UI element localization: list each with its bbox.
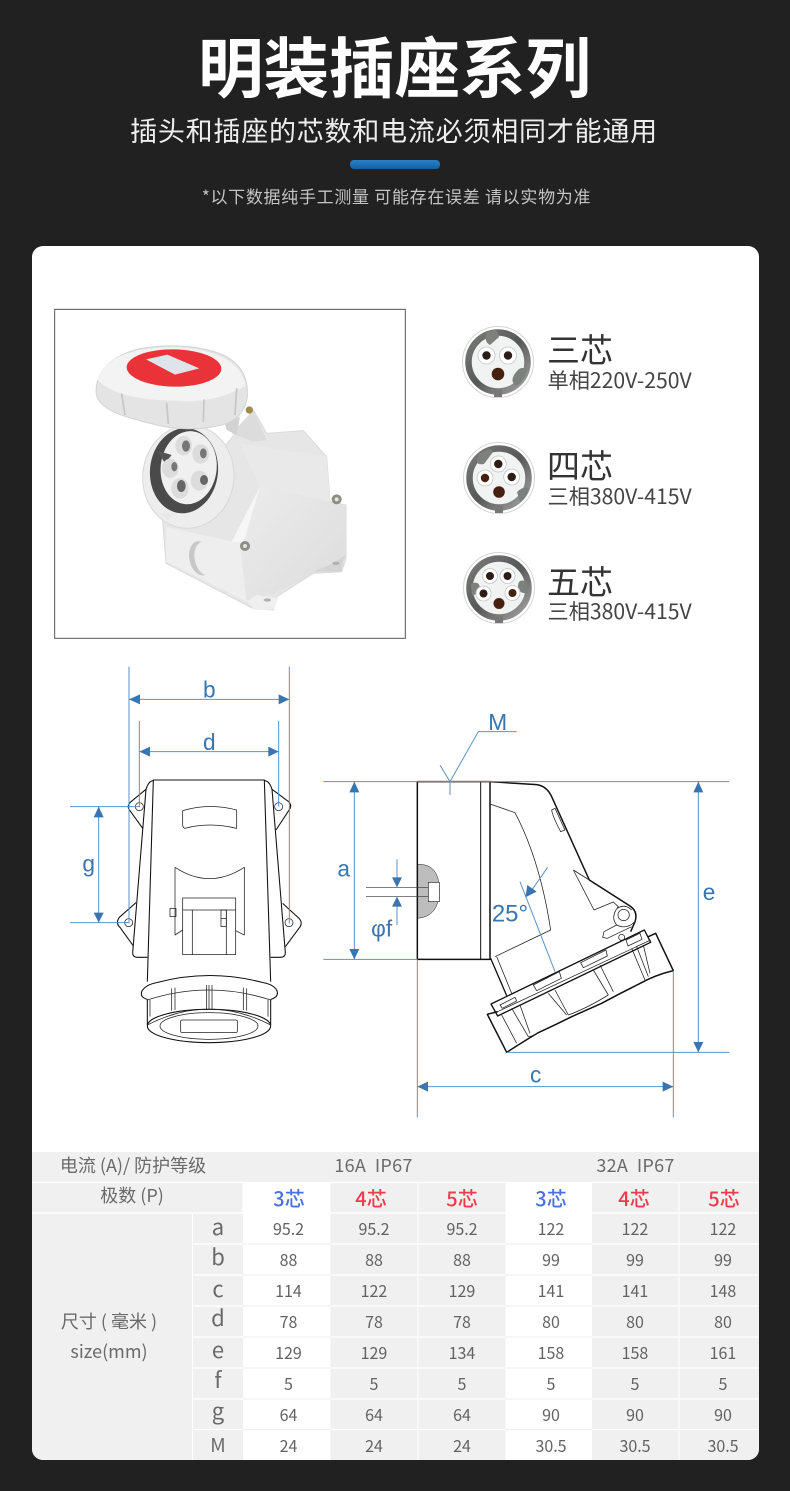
table header: poles: 5芯 bbox=[708, 1183, 740, 1212]
table values: column 16A 5 core: 88 bbox=[453, 1247, 471, 1271]
table values: column 32A 4 core: 99 bbox=[626, 1247, 644, 1271]
table header: poles: 3芯 bbox=[273, 1183, 305, 1212]
dimension e: e bbox=[703, 879, 715, 905]
table header: poles: 3芯 bbox=[535, 1183, 567, 1212]
table header: poles: 4芯 bbox=[355, 1183, 387, 1212]
table values: column 16A 3 core: 114 bbox=[275, 1278, 302, 1302]
table: dimensions bbox=[32, 1152, 759, 1460]
table values: column 32A 3 core: 141 bbox=[538, 1278, 564, 1302]
table header: current and protection bbox=[62, 1156, 674, 1176]
subtitle: 插头和插座的芯数和电流必须相同才能通用 bbox=[130, 110, 658, 149]
table values: column 32A 4 core: 5 bbox=[631, 1371, 640, 1395]
dimension e bbox=[417, 782, 729, 1052]
table side label: size: size(mm) bbox=[70, 1338, 148, 1364]
table values: column 32A 5 core: 90 bbox=[714, 1402, 732, 1426]
table values: column 32A 4 core bbox=[619, 1216, 651, 1457]
table values: column 32A 5 core: 5 bbox=[719, 1371, 728, 1395]
table row labels: e bbox=[212, 1333, 224, 1365]
table values: column 16A 4 core: 122 bbox=[361, 1278, 387, 1302]
table row labels: d bbox=[211, 1301, 225, 1333]
table values: column 32A 4 core: 90 bbox=[626, 1402, 644, 1426]
table values: column 32A 3 core: 80 bbox=[542, 1309, 560, 1333]
table values: column 16A 3 core: 24 bbox=[280, 1433, 297, 1457]
table values: column 16A 5 core bbox=[446, 1216, 478, 1457]
table values: column 32A 4 core: 122 bbox=[622, 1216, 648, 1240]
table values: column 16A 4 core: 78 bbox=[365, 1309, 383, 1333]
text: five-core label bbox=[547, 556, 693, 626]
table row labels: g bbox=[212, 1394, 225, 1426]
icon: socket body bbox=[163, 410, 346, 610]
icon: hinged cover with red cap bbox=[96, 346, 253, 435]
dimension a bbox=[323, 782, 417, 959]
table values: column 16A 4 core: 64 bbox=[365, 1402, 383, 1426]
dimension a: a bbox=[337, 856, 350, 882]
dimension M leader bbox=[440, 709, 517, 795]
table values: column 16A 5 core: 134 bbox=[449, 1340, 475, 1364]
dimension phi f: φf bbox=[371, 916, 393, 942]
table header: current and protection: 16A IP67 bbox=[334, 1152, 413, 1178]
table values: column 32A 4 core: 30.5 bbox=[619, 1433, 651, 1457]
table row labels: f bbox=[214, 1363, 222, 1395]
dimension d bbox=[139, 721, 279, 807]
table row labels: b bbox=[211, 1240, 225, 1272]
table header: poles bbox=[100, 1186, 739, 1208]
dimension c: c bbox=[530, 1061, 541, 1087]
dimension d: d bbox=[203, 729, 216, 755]
panel: product photo bbox=[55, 309, 405, 638]
table values: column 16A 5 core: 64 bbox=[453, 1402, 471, 1426]
table values: column 32A 5 core: 122 bbox=[710, 1216, 736, 1240]
table values: column 32A 5 core: 161 bbox=[710, 1340, 736, 1364]
table values: column 32A 3 core: 5 bbox=[547, 1371, 556, 1395]
table side label: size: 尺寸 ( 毫米 ) bbox=[61, 1308, 157, 1334]
table values: column 16A 3 core: 95.2 bbox=[273, 1216, 304, 1240]
dimension M leader: M bbox=[488, 709, 507, 735]
table row labels bbox=[212, 1222, 224, 1452]
diagram: side view with dimensions bbox=[323, 709, 729, 1117]
table values: column 16A 5 core: 129 bbox=[449, 1278, 475, 1302]
table values: column 16A 5 core: 24 bbox=[453, 1433, 471, 1457]
table values: column 16A 4 core: 95.2 bbox=[358, 1216, 390, 1240]
blue accent bar bbox=[350, 160, 440, 169]
table row labels: c bbox=[212, 1272, 224, 1304]
table side label: size bbox=[62, 1312, 156, 1362]
table values: column 16A 3 core: 129 bbox=[275, 1340, 302, 1364]
table values: column 32A 4 core: 158 bbox=[622, 1340, 648, 1364]
table values: column 16A 5 core: 5 bbox=[458, 1371, 467, 1395]
table header: poles: 极数 (P) bbox=[100, 1182, 164, 1208]
table values: column 32A 4 core: 141 bbox=[622, 1278, 648, 1302]
dimension g: g bbox=[82, 850, 95, 876]
table values: column 32A 3 core: 158 bbox=[538, 1340, 564, 1364]
side view outline bbox=[417, 782, 673, 1052]
table values: column 16A 5 core: 95.2 bbox=[446, 1216, 478, 1240]
table values: column 32A 5 core bbox=[707, 1216, 739, 1457]
table values: column 32A 5 core: 148 bbox=[710, 1278, 736, 1302]
table values: column 16A 5 core: 78 bbox=[453, 1309, 471, 1333]
icon: socket face bbox=[138, 421, 239, 533]
table values: column 16A 3 core: 64 bbox=[280, 1402, 297, 1426]
table values: column 16A 4 core: 24 bbox=[365, 1433, 383, 1457]
icon: four-pin plug bbox=[464, 442, 534, 514]
table header: current and protection: 电流 (A)/ 防护等级 bbox=[60, 1152, 206, 1178]
table values: column 32A 4 core: 80 bbox=[626, 1309, 644, 1333]
table values: column 16A 4 core bbox=[358, 1216, 390, 1457]
diagram: front view with dimensions bbox=[70, 667, 301, 1043]
table values: column 16A 4 core: 5 bbox=[370, 1371, 379, 1395]
dimension g bbox=[70, 807, 140, 923]
text: three-core label: 单相220V-250V bbox=[548, 364, 693, 395]
table row labels: a bbox=[212, 1210, 224, 1242]
text: five-core label: 五芯 bbox=[547, 556, 613, 604]
table values: column 32A 3 core bbox=[535, 1216, 567, 1457]
table values: column 32A 3 core: 30.5 bbox=[535, 1433, 567, 1457]
front view outline bbox=[117, 780, 301, 1043]
table header: poles: 4芯 bbox=[618, 1183, 650, 1212]
table row labels: M bbox=[210, 1431, 226, 1458]
text: four-core label bbox=[547, 440, 693, 511]
table values: column 16A 3 core: 78 bbox=[280, 1309, 297, 1333]
dimension 25 degrees: 25° bbox=[492, 901, 528, 928]
dimension c bbox=[417, 959, 673, 1117]
table values: column 32A 3 core: 90 bbox=[542, 1402, 560, 1426]
table values: column 32A 5 core: 80 bbox=[714, 1309, 732, 1333]
disclaimer note: *以下数据纯手工测量 可能存在误差 请以实物为准 bbox=[202, 183, 591, 208]
title: 明装插座系列 bbox=[198, 16, 591, 111]
table header: current and protection: 32A IP67 bbox=[596, 1152, 675, 1178]
table values: column 16A 3 core: 88 bbox=[280, 1247, 297, 1271]
table values: column 32A 5 core: 30.5 bbox=[707, 1433, 739, 1457]
dimension 25 degrees bbox=[492, 867, 555, 972]
table values: column 32A 3 core: 99 bbox=[542, 1247, 560, 1271]
table values: column 16A 4 core: 88 bbox=[365, 1247, 383, 1271]
text: four-core label: 四芯 bbox=[547, 440, 613, 488]
table values: column 16A 3 core: 5 bbox=[284, 1371, 293, 1395]
text: three-core label: 三芯 bbox=[547, 324, 613, 372]
table values: column 32A 5 core: 99 bbox=[714, 1247, 732, 1271]
text: four-core label: 三相380V-415V bbox=[548, 480, 693, 511]
table values: column 16A 4 core: 129 bbox=[361, 1340, 387, 1364]
text: five-core label: 三相380V-415V bbox=[548, 595, 693, 626]
table values: column 32A 3 core: 122 bbox=[538, 1216, 564, 1240]
table header: poles: 5芯 bbox=[446, 1183, 478, 1212]
text: three-core label bbox=[547, 324, 693, 395]
icon: three-pin plug bbox=[462, 326, 534, 398]
table values: column 16A 3 core bbox=[273, 1216, 304, 1457]
panel: white card bbox=[32, 246, 759, 1460]
icon: five-pin plug bbox=[464, 552, 534, 624]
dimension b bbox=[129, 667, 289, 923]
dimension b: b bbox=[203, 677, 216, 703]
dimension phi f bbox=[366, 859, 428, 942]
